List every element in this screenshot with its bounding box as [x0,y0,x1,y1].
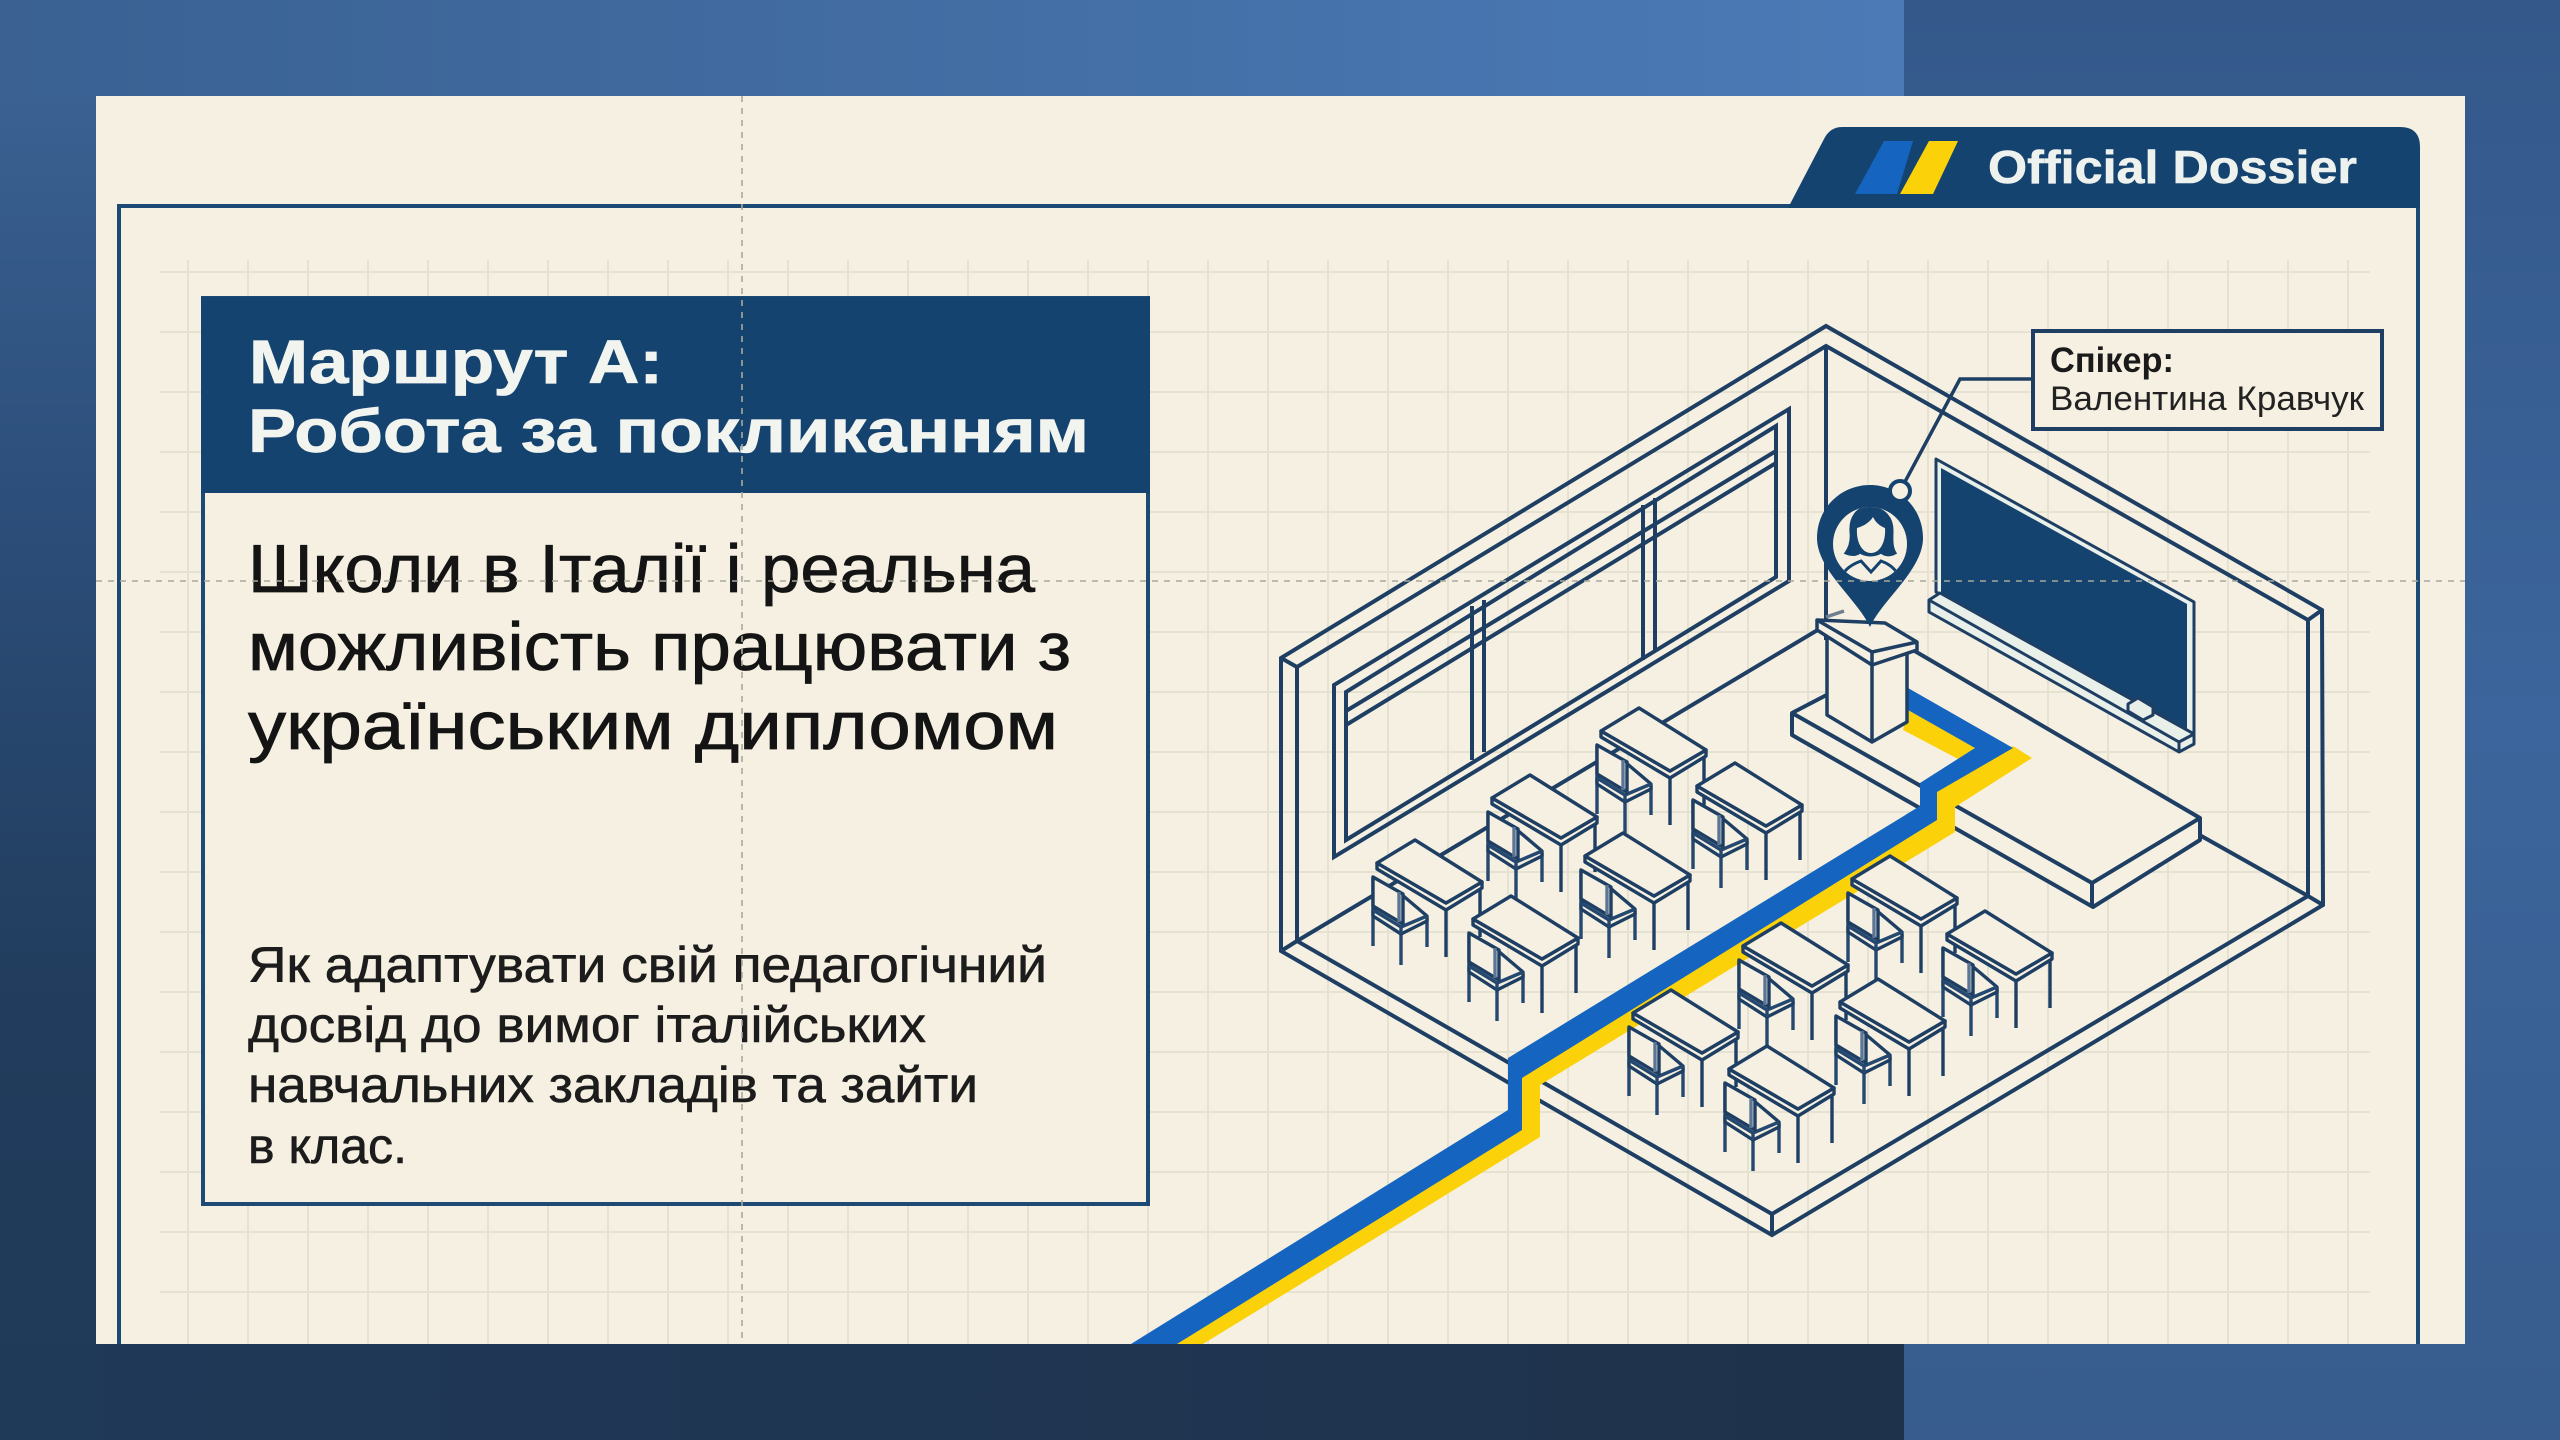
teacher platform [1792,650,2200,907]
podium [1817,611,1917,742]
subtitle: українським дипломом [248,688,1058,764]
body text: Як адаптувати свій педагогічний [248,937,1047,993]
windows [1334,409,1789,857]
body text [248,937,1047,1174]
icon: speaker location pin [1817,481,1923,627]
icon: Ukrainian flag stripes [1855,141,1958,194]
tab label: Official Dossier [1988,141,2357,193]
body text: досвід до вимог італійських [248,997,926,1053]
panel: route description [201,297,1150,1204]
desks: front group [1629,856,2052,1171]
tab: Official Dossier [1788,127,2420,208]
desks: rear group [1373,708,1802,1021]
callout: speaker name: Валентина Кравчук [2050,380,2365,418]
route line: blue [1131,688,2013,1344]
illustration: isometric classroom [1131,326,2323,1344]
callout leader line [1900,379,2033,491]
subtitle: Школи в Італії і реальна [248,531,1035,607]
route line: yellow upper arm [1903,708,1990,760]
blackboard [1929,459,2194,752]
panel header: Робота за покликанням [248,397,1089,465]
chalk eraser [2128,698,2153,720]
room walls and floor [1281,326,2323,1235]
panel header [201,297,1150,493]
body text: навчальних закладів та зайти [248,1057,978,1113]
subtitle [248,531,1071,764]
panel header: Маршрут А: [249,328,663,396]
subtitle: можливість працювати з [248,609,1071,685]
callout: speaker name: Спікер: [2050,341,2174,380]
outer frame line [119,200,2418,1344]
body text: в клас. [248,1118,407,1174]
callout: speaker name [2033,331,2382,429]
route line: yellow [1170,746,2032,1344]
blueprint grid [160,260,2370,1344]
